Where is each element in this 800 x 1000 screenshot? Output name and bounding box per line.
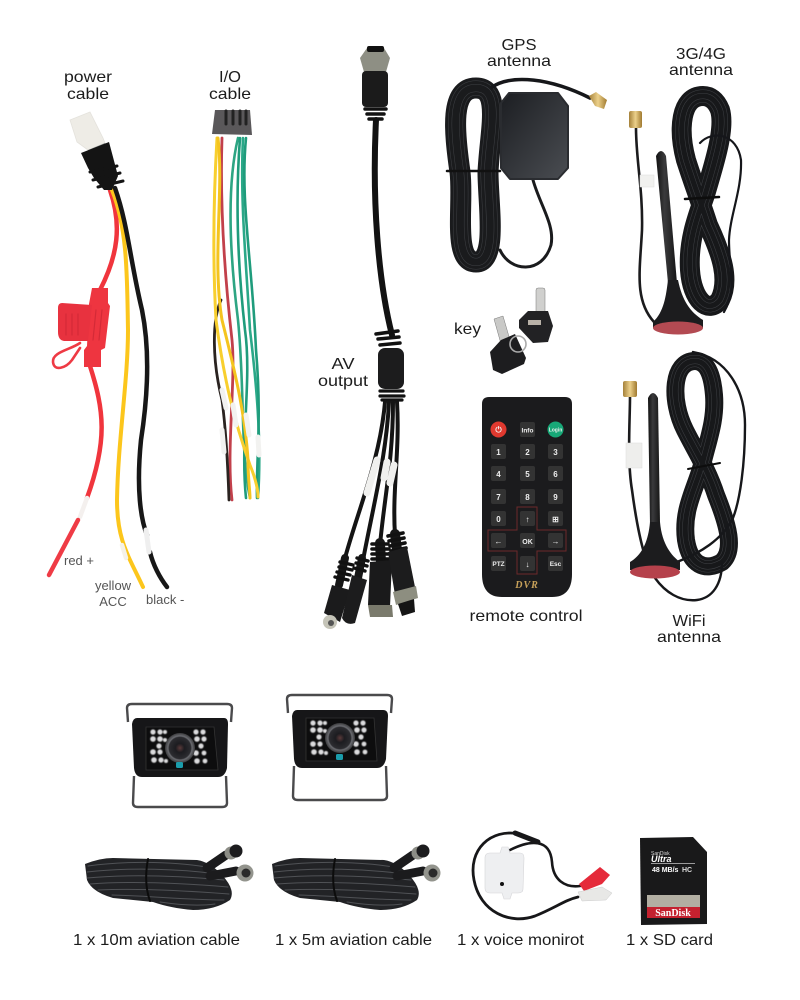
label: power cable bbox=[64, 69, 113, 103]
buttons: 0 bbox=[496, 515, 501, 524]
puck bbox=[501, 93, 568, 179]
label: I/O cable: I/O bbox=[219, 69, 241, 86]
coil bbox=[655, 352, 745, 600]
indicator bbox=[336, 754, 343, 760]
white plug bbox=[578, 887, 612, 901]
key two bbox=[510, 288, 553, 352]
label: WiFi antenna bbox=[657, 613, 721, 646]
green wires bbox=[230, 138, 250, 498]
bracket bbox=[127, 704, 232, 807]
label: power cable: power bbox=[64, 69, 113, 86]
label: 3G/4G antenna bbox=[669, 46, 733, 79]
buttons: OK bbox=[522, 539, 533, 546]
ferrite bbox=[376, 331, 400, 345]
label: WiFi antenna: antenna bbox=[657, 629, 721, 646]
buttons: ↓ bbox=[526, 560, 530, 569]
label: AV output bbox=[318, 356, 369, 390]
connector bbox=[70, 112, 105, 150]
cable labels bbox=[367, 460, 394, 493]
caption: 10m aviation cable: 1 x 10m aviation cable bbox=[73, 932, 240, 949]
buttons: 6 bbox=[553, 470, 558, 479]
camera two bbox=[287, 695, 392, 800]
connectors bbox=[394, 855, 413, 868]
top connector bbox=[360, 48, 390, 72]
buttons: Login bbox=[549, 428, 562, 434]
d-pad outline bbox=[488, 507, 566, 574]
yellow wire bbox=[112, 190, 143, 587]
end connector C bbox=[368, 543, 393, 617]
connectors bbox=[207, 855, 226, 868]
label: key: key bbox=[454, 321, 481, 338]
wire tags bbox=[222, 390, 259, 455]
coil bbox=[85, 858, 232, 910]
whip antenna bbox=[648, 393, 660, 524]
label: GPS antenna: antenna bbox=[487, 53, 551, 70]
buttons: 5 bbox=[525, 470, 530, 479]
label: yellow ACC bbox=[95, 578, 132, 609]
aviation cable 10m bbox=[85, 844, 254, 910]
buttons: ↑ bbox=[526, 515, 530, 524]
DVR logo: DVR bbox=[514, 580, 539, 591]
label: black -: black - bbox=[146, 592, 184, 607]
connector bbox=[212, 110, 252, 135]
buttons: Esc bbox=[550, 561, 562, 568]
cable bbox=[492, 79, 590, 98]
end connector D bbox=[388, 533, 418, 616]
caption: SD card: 1 x SD card bbox=[626, 932, 713, 949]
magnetic base bbox=[630, 522, 680, 570]
buttons: 9 bbox=[553, 493, 558, 502]
buttons: ⏻ bbox=[495, 426, 502, 434]
WiFi antenna bbox=[623, 352, 745, 600]
remote control bbox=[482, 397, 572, 597]
coil bbox=[682, 96, 741, 312]
buttons: 3 bbox=[553, 448, 558, 457]
label: I/O cable: cable bbox=[209, 86, 251, 103]
buttons bbox=[490, 422, 564, 571]
caption: 5m aviation cable: 1 x 5m aviation cable bbox=[275, 932, 432, 949]
buttons: ⊞ bbox=[552, 515, 559, 524]
AV output cable bbox=[323, 46, 418, 629]
buttons: PTZ bbox=[492, 561, 505, 568]
label: power cable: cable bbox=[67, 86, 109, 103]
buttons: 4 bbox=[496, 470, 501, 479]
cable bbox=[375, 120, 392, 335]
branch cables bbox=[345, 402, 385, 558]
label: AV output: AV bbox=[332, 356, 355, 373]
key one bbox=[490, 316, 526, 374]
buttons: → bbox=[552, 537, 560, 546]
buttons: 8 bbox=[525, 493, 530, 502]
cable bbox=[473, 833, 578, 919]
fuse holder bbox=[53, 288, 110, 368]
label: red +: red + bbox=[64, 553, 94, 568]
3G/4G antenna bbox=[629, 96, 741, 334]
aviation cable 5m bbox=[272, 844, 440, 910]
indicator bbox=[176, 762, 183, 768]
label: yellow ACC: ACC bbox=[99, 594, 127, 609]
housing bbox=[292, 710, 388, 768]
I/O cable bbox=[212, 110, 259, 500]
lens bbox=[325, 723, 355, 753]
SD card: SanDisk bbox=[655, 908, 691, 919]
black wire bbox=[115, 188, 167, 587]
lens bbox=[165, 733, 195, 763]
label: 3G/4G antenna: 3G/4G bbox=[676, 46, 726, 63]
coil bbox=[447, 88, 500, 262]
red plug bbox=[579, 867, 610, 891]
label: WiFi antenna: WiFi bbox=[672, 613, 706, 630]
magnetic base bbox=[653, 280, 703, 328]
LEDs bbox=[150, 729, 207, 764]
SD card: 48 MB/s bbox=[652, 867, 679, 874]
buttons: 1 bbox=[496, 448, 501, 457]
buttons: ← bbox=[494, 537, 502, 546]
SD card: Ultra bbox=[651, 854, 672, 864]
LEDs bbox=[310, 720, 367, 755]
voice monitor bbox=[473, 833, 612, 919]
label: yellow ACC: yellow bbox=[95, 578, 132, 593]
red wire bbox=[87, 190, 117, 498]
GPS antenna bbox=[447, 79, 607, 267]
tag bbox=[626, 443, 642, 468]
SD card bbox=[640, 837, 707, 925]
buttons: Info bbox=[522, 428, 533, 434]
camera one bbox=[127, 704, 232, 807]
label: AV output: output bbox=[318, 373, 369, 390]
label: GPS antenna bbox=[487, 37, 551, 70]
keys bbox=[490, 288, 553, 374]
end connector A bbox=[323, 558, 353, 629]
connector bbox=[623, 381, 637, 397]
buttons: 2 bbox=[525, 448, 530, 457]
housing bbox=[132, 718, 228, 777]
label: remote control: remote control bbox=[470, 608, 582, 625]
cable bbox=[636, 128, 654, 322]
label: 3G/4G antenna: antenna bbox=[669, 62, 733, 79]
body bbox=[482, 397, 572, 597]
connector bbox=[629, 111, 642, 128]
coil bbox=[272, 858, 419, 910]
module bbox=[485, 847, 524, 899]
end connector B bbox=[342, 558, 368, 624]
power cable bbox=[49, 112, 167, 587]
SD card: HC bbox=[682, 867, 692, 874]
connector bbox=[589, 92, 607, 109]
whip antenna bbox=[656, 151, 677, 283]
label: I/O cable bbox=[209, 69, 251, 103]
label band bbox=[647, 895, 700, 907]
caption: voice monirot: 1 x voice monirot bbox=[457, 932, 585, 949]
label: GPS antenna: GPS bbox=[502, 37, 536, 54]
buttons: 7 bbox=[496, 493, 501, 502]
ultra branding: SanDisk bbox=[651, 851, 670, 857]
tag bbox=[640, 175, 654, 187]
bracket bbox=[287, 695, 392, 800]
yellow wires bbox=[214, 138, 258, 497]
cable bbox=[629, 397, 645, 556]
red and black wires bbox=[221, 138, 233, 500]
